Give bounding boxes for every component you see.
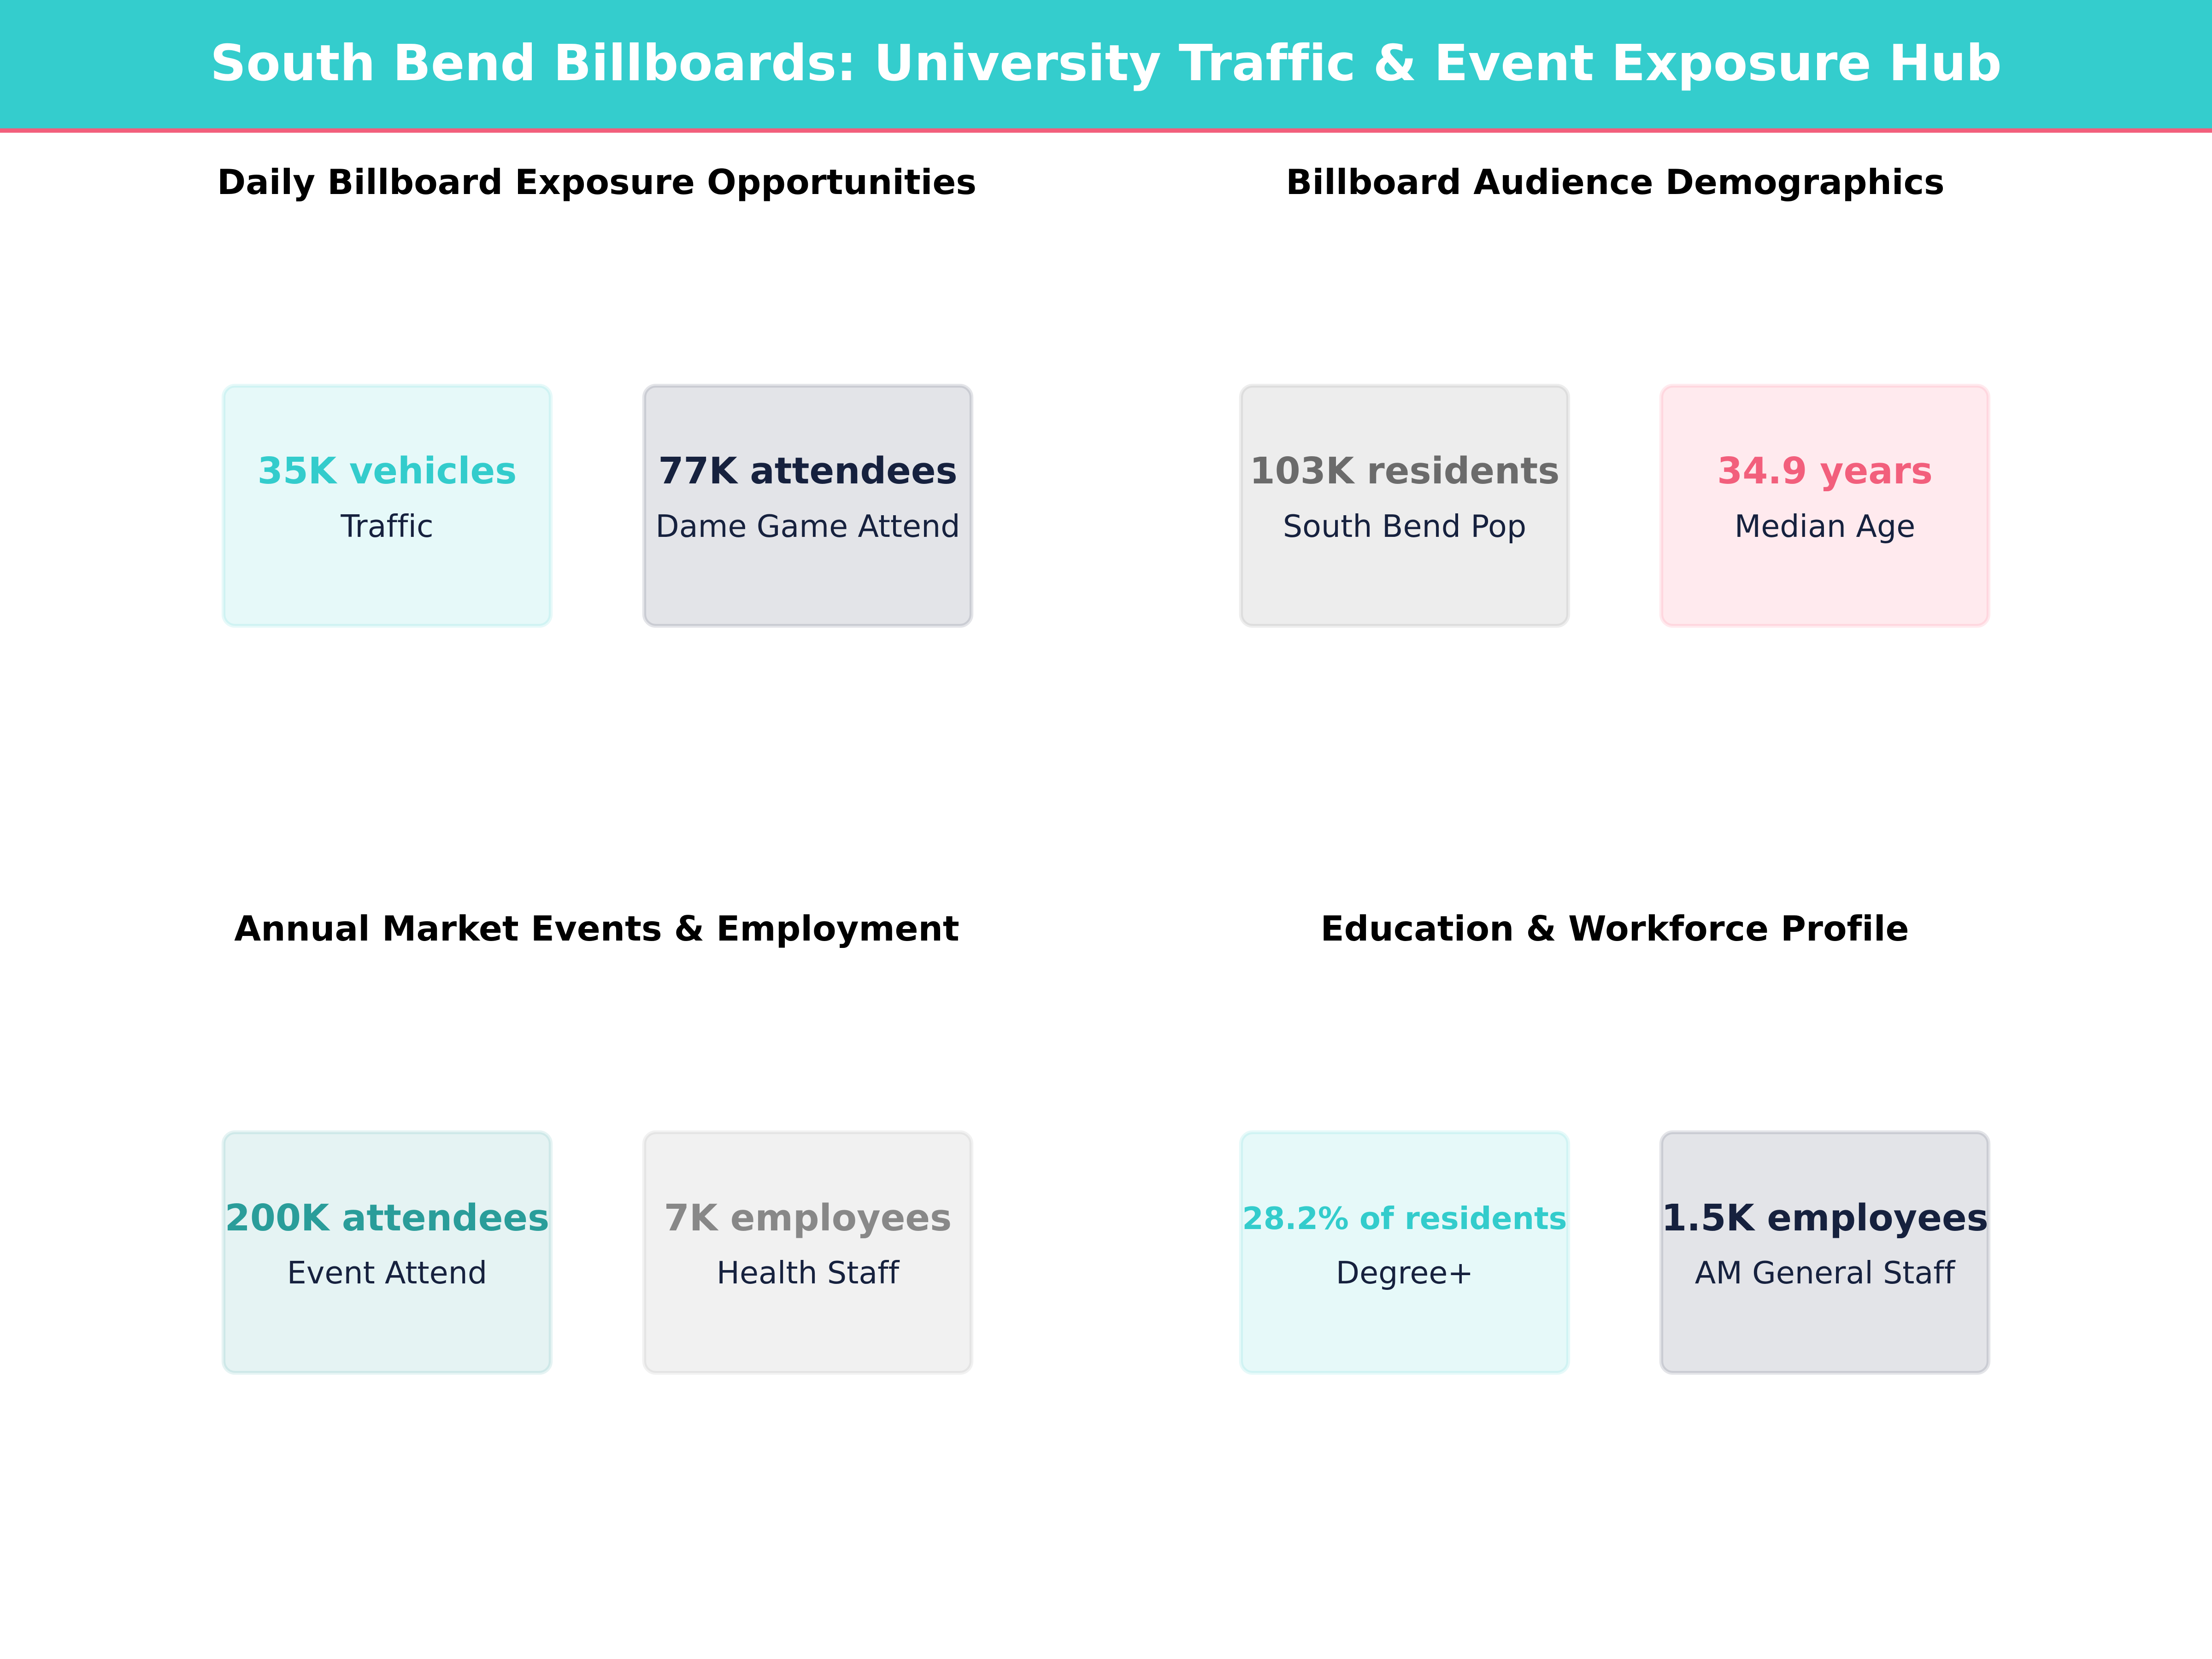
panel: annual market events xyxy=(224,908,971,1373)
card: health staff xyxy=(644,1132,971,1373)
card: median age: 34.9 years xyxy=(1717,450,1933,492)
card: traffic: 35K vehicles xyxy=(258,450,517,492)
card: health staff: 7K employees xyxy=(664,1197,952,1239)
panel: daily billboard exposure xyxy=(217,162,977,626)
card: degree: 28.2% of residents xyxy=(1242,1200,1567,1236)
heading: education: Education & Workforce Profile xyxy=(1321,908,1909,949)
card: am general staff: AM General Staff xyxy=(1695,1255,1956,1291)
card: event attendance: Event Attend xyxy=(287,1255,487,1291)
card: traffic xyxy=(224,386,551,626)
card: population: South Bend Pop xyxy=(1283,508,1526,544)
card: game attendance: Dame Game Attend xyxy=(655,508,960,544)
heading: daily exposure: Daily Billboard Exposure Opportunities xyxy=(217,162,977,202)
title: South Bend Billboards: University Traffic & Event Exposure Hub xyxy=(210,34,2002,92)
panel: education and workforce xyxy=(1241,908,1988,1373)
panel: audience demographics xyxy=(1241,162,1988,626)
card: event attendance: 200K attendees xyxy=(225,1197,549,1239)
heading: demographics: Billboard Audience Demographics xyxy=(1286,162,1945,202)
card: am general staff: 1.5K employees xyxy=(1661,1197,1988,1239)
card: degree: Degree+ xyxy=(1336,1255,1473,1291)
card: degree xyxy=(1241,1132,1568,1373)
card: game attendance: 77K attendees xyxy=(658,450,958,492)
card: game attendance xyxy=(644,386,971,626)
heading: events: Annual Market Events & Employment xyxy=(234,908,959,949)
card: population: 103K residents xyxy=(1250,450,1559,492)
card: am general staff xyxy=(1661,1132,1988,1373)
card: health staff: Health Staff xyxy=(717,1255,900,1291)
card: population xyxy=(1241,386,1568,626)
card: median age: Median Age xyxy=(1735,508,1915,544)
card: median age xyxy=(1661,386,1988,626)
header banner xyxy=(0,0,2212,133)
card: event attendance xyxy=(224,1132,551,1373)
card: traffic: Traffic xyxy=(340,508,434,544)
